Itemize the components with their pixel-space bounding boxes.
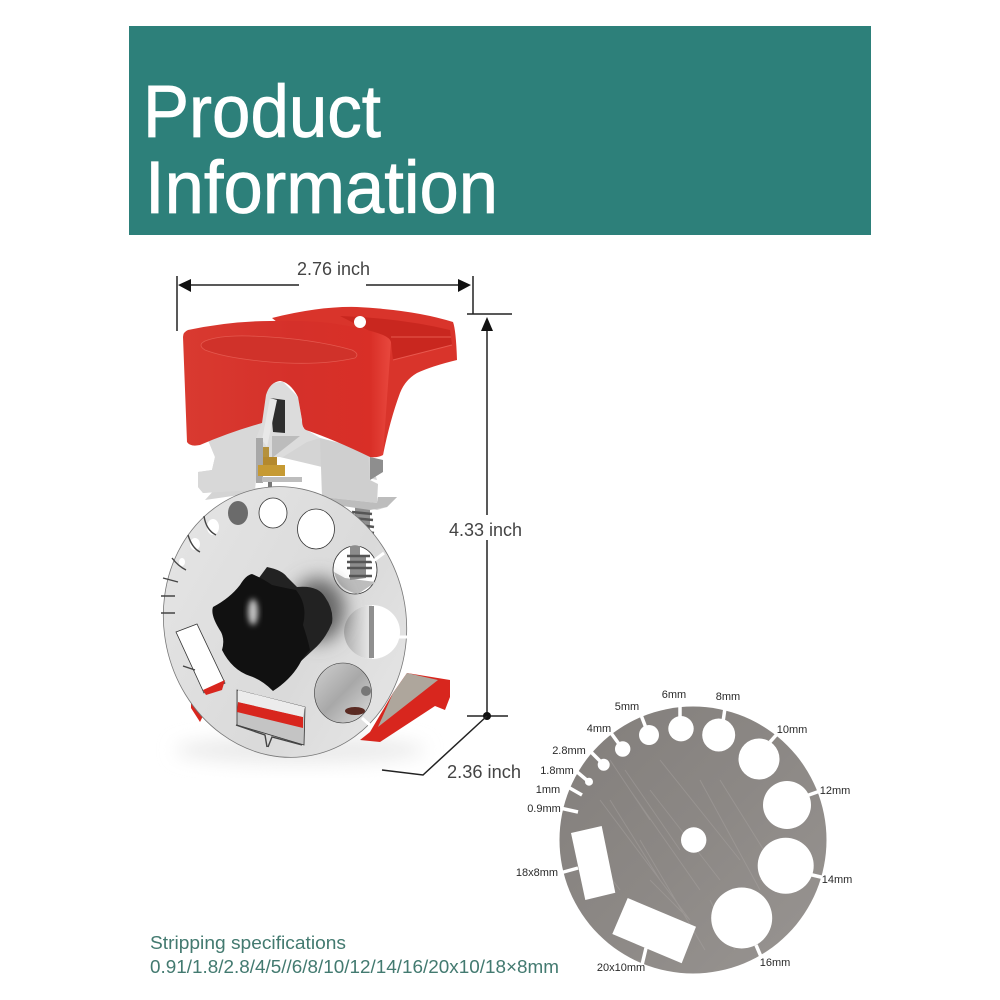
- ground shadow: [175, 736, 425, 764]
- stripping specifications text: Stripping specifications: [150, 933, 346, 953]
- red handle front: [183, 321, 391, 457]
- size labels: 14mm: [822, 874, 852, 886]
- size labels: [516, 689, 852, 974]
- title: Product: [143, 70, 381, 153]
- dimension: height 4.33 inch: [449, 314, 522, 720]
- blade: [270, 398, 285, 433]
- knob shadow: [291, 578, 345, 642]
- size labels: 20x10mm: [597, 962, 645, 974]
- stripping specifications text: 0.91/1.8/2.8/4/5//6/8/10/12/14/16/20x10/18×8mm: [150, 957, 559, 977]
- size labels: 16mm: [760, 957, 790, 969]
- size labels: 6mm: [662, 689, 686, 701]
- red handle inner trough: [340, 316, 452, 360]
- size labels: 10mm: [777, 724, 807, 736]
- size labels: 0.9mm: [527, 803, 561, 815]
- dimension: depth 2.36 inch: [382, 716, 521, 782]
- size labels: 12mm: [820, 785, 850, 797]
- black star knob: [212, 567, 332, 691]
- product photo: wire stripper: [138, 307, 457, 780]
- wheel slots: [161, 516, 302, 747]
- handle grip recess: [201, 336, 357, 363]
- size labels: 5mm: [615, 701, 639, 713]
- size labels: 8mm: [716, 691, 740, 703]
- spring behind wheel: [352, 505, 374, 537]
- title: [143, 70, 498, 229]
- brushed texture: [590, 760, 800, 950]
- header banner: [129, 26, 871, 235]
- round holes: [585, 716, 814, 948]
- mounting hole: [354, 316, 366, 328]
- steel blade disc diagram: [516, 689, 852, 974]
- brass nut and screw: [256, 438, 302, 496]
- dimension: width 2.76 inch: 2.76 inch: [297, 259, 370, 279]
- dimension: height 4.33 inch: 4.33 inch: [449, 520, 522, 540]
- dimension: width 2.76 inch: [177, 259, 473, 331]
- red handle back: [272, 307, 457, 455]
- size labels: 18x8mm: [516, 867, 558, 879]
- bracket lower lip: [322, 497, 397, 510]
- radial slots: [560, 705, 825, 965]
- metal bracket: [198, 382, 397, 510]
- bracket tab: [370, 457, 383, 480]
- stripping specifications text: [150, 933, 559, 977]
- size labels: 2.8mm: [552, 745, 586, 757]
- dimension: depth 2.36 inch: 2.36 inch: [447, 762, 521, 782]
- size labels: 1.8mm: [540, 765, 574, 777]
- steel wheel: [138, 464, 432, 780]
- title: Information: [145, 146, 498, 229]
- size labels: 4mm: [587, 723, 611, 735]
- red base: [191, 673, 450, 742]
- wheel holes: [176, 498, 410, 745]
- size labels: 1mm: [536, 784, 560, 796]
- rectangular holes: [571, 826, 696, 963]
